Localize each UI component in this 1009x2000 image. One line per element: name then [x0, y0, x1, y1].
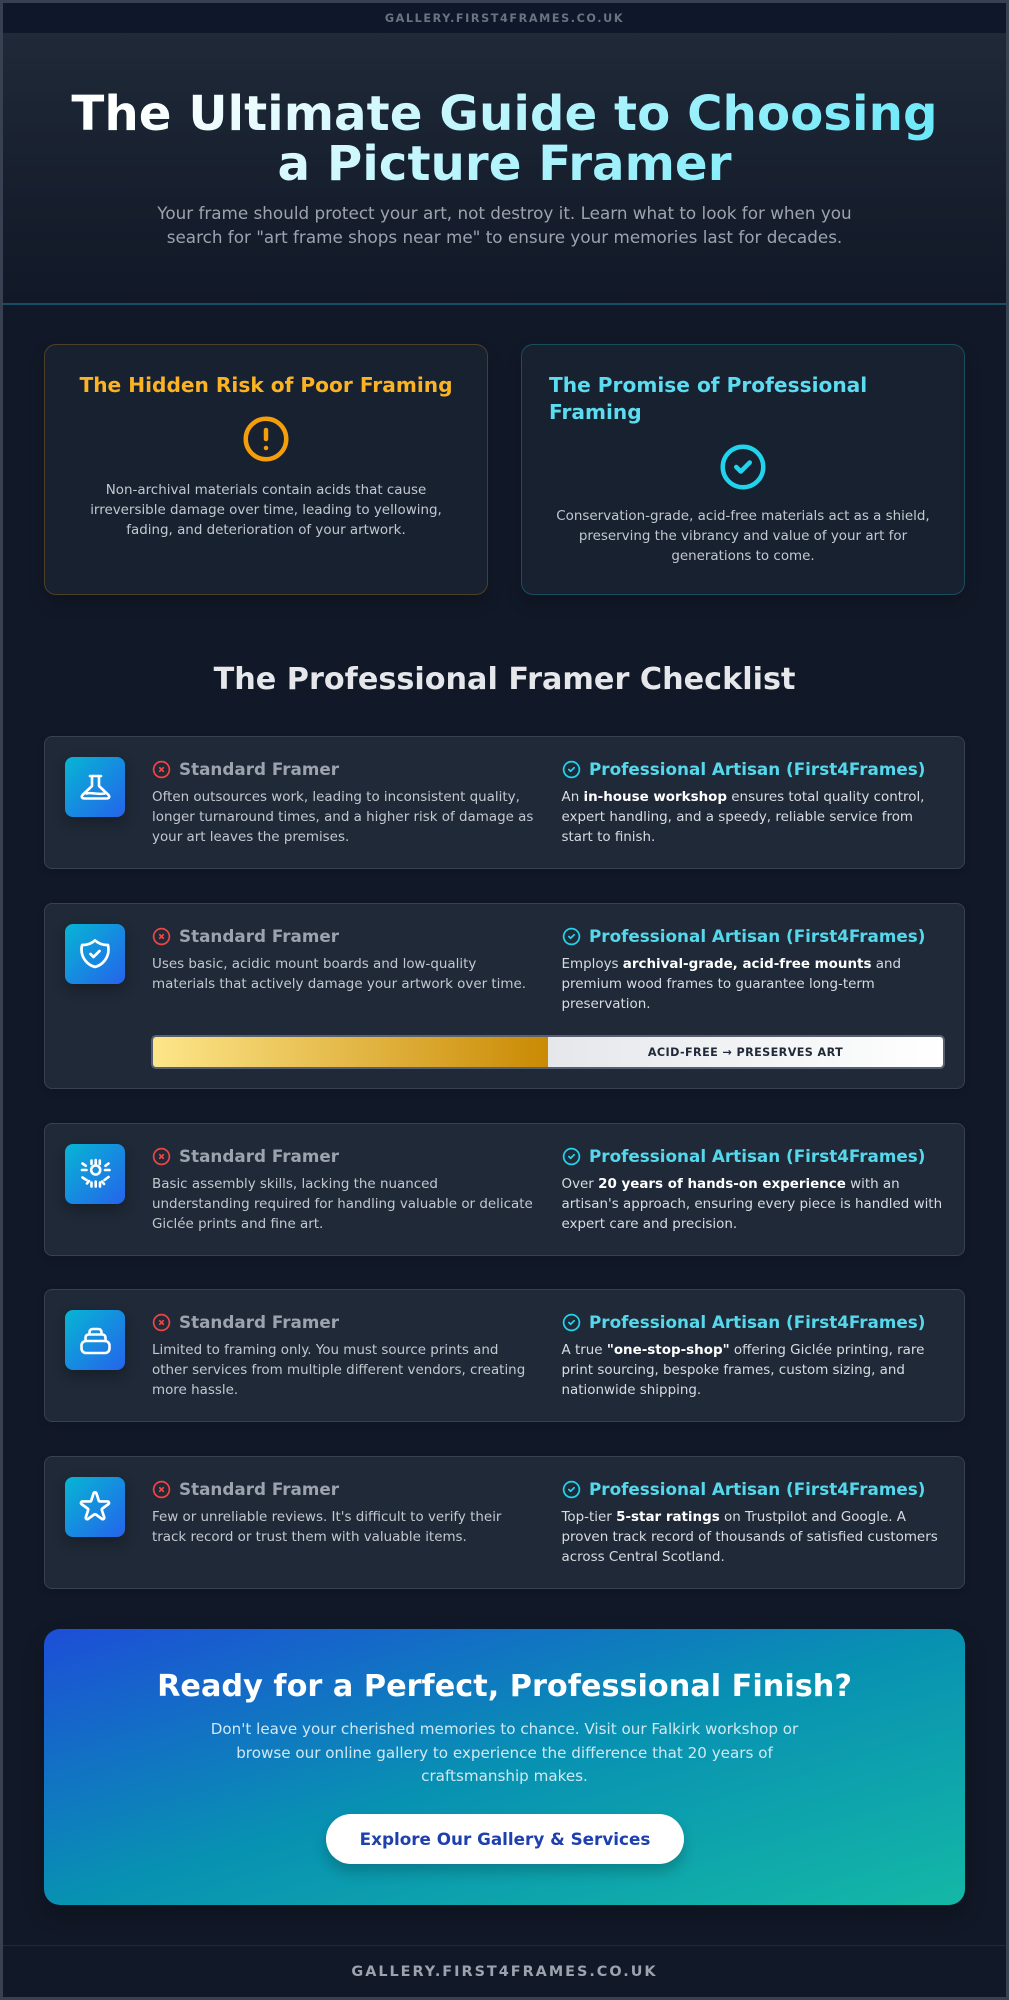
top url bar: [3, 3, 1006, 33]
standard text: Uses basic, acidic mount boards and low-quality: [152, 956, 476, 972]
checklist heading: The Professional Framer Checklist: [214, 662, 795, 697]
icon: check: [720, 444, 766, 490]
professional text: start to finish.: [562, 830, 655, 845]
acid-free white segment: ACID-FREE → PRESERVES ART: [648, 1046, 843, 1059]
panel: professional promise: [521, 344, 965, 595]
row: services: Professional Artisan (First4Frames): [589, 1312, 925, 1332]
icon: flask: [65, 757, 125, 817]
acidic gold segment: [153, 1037, 548, 1067]
title: a Picture Framer: [277, 136, 732, 192]
row: materials: [44, 903, 965, 1089]
professional heading: [562, 1312, 925, 1332]
standard heading: [152, 1146, 339, 1166]
subtitle: search for "art frame shops near me" to ensure your memories last for decades.: [167, 227, 842, 247]
icon: shield: [65, 924, 125, 984]
standard text: [152, 1342, 525, 1398]
row: materials: Standard Framer: [179, 926, 339, 946]
panel text: [556, 509, 930, 564]
title: [71, 86, 938, 192]
row: experience: [44, 1123, 965, 1256]
panel text: generations to come.: [671, 549, 815, 564]
cta text: browse our online gallery to experience the difference that 20 years of: [236, 1744, 773, 1762]
cta text: craftsmanship makes.: [421, 1767, 588, 1785]
panel: hidden risk: [44, 344, 488, 595]
panel text: Non-archival materials contain acids that cause: [106, 482, 426, 498]
cta button: [326, 1814, 684, 1864]
professional text: [562, 1342, 924, 1398]
icon: warning: [244, 416, 288, 462]
standard text: Few or unreliable reviews. It's difficult to verify their: [152, 1510, 501, 1524]
standard text: Giclée prints and fine art.: [152, 1217, 323, 1232]
standard text: [152, 956, 526, 992]
professional text: Over 20 years of hands-on experience with an: [562, 1176, 900, 1192]
professional text: artisan's approach, ensuring every piece is handled with: [562, 1197, 942, 1212]
cta text: [211, 1720, 798, 1785]
standard text: materials that actively damage your artwork over time.: [152, 977, 526, 992]
row: materials: Professional Artisan (First4Frames): [589, 926, 925, 946]
professional text: [561, 1510, 938, 1565]
professional text: premium wood frames to guarantee long-term: [562, 977, 875, 992]
standard text: [152, 790, 533, 845]
panel heading: The Hidden Risk of Poor Framing: [79, 373, 453, 397]
footer url: [3, 1945, 1006, 1997]
panel text: irreversible damage over time, leading to yellowing,: [90, 503, 442, 518]
standard heading: [152, 926, 339, 946]
row: workshop: [44, 736, 965, 869]
standard text: Often outsources work, leading to inconsistent quality,: [152, 790, 520, 804]
standard heading: [152, 759, 339, 779]
icon: stack: [65, 1310, 125, 1370]
icon: expertise burst: [65, 1144, 125, 1204]
standard text: your art leaves the premises.: [152, 830, 349, 845]
standard text: more hassle.: [152, 1383, 238, 1398]
professional text: expert handling, and a speedy, reliable service from: [562, 810, 913, 825]
professional text: print sourcing, bespoke frames, custom sizing, and: [562, 1363, 905, 1378]
professional text: expert care and precision.: [562, 1217, 737, 1232]
professional text: [562, 790, 924, 845]
professional text: An in-house workshop ensures total quality control,: [562, 790, 924, 804]
row: experience: Standard Framer: [179, 1146, 339, 1166]
panel text: [90, 482, 442, 538]
professional heading: [562, 1146, 925, 1166]
panel heading: [549, 373, 867, 424]
row: workshop: Professional Artisan (First4Frames): [589, 759, 925, 779]
subtitle: [157, 203, 852, 247]
subtitle: Your frame should protect your art, not destroy it. Learn what to look for when you: [157, 203, 852, 223]
standard text: other services from multiple different vendors, creating: [152, 1363, 525, 1378]
standard heading: [152, 1312, 339, 1332]
professional text: proven track record of thousands of satisfied customers: [562, 1530, 938, 1545]
hero header: [3, 33, 1006, 305]
professional text: A true "one-stop-shop" offering Giclée printing, rare: [562, 1342, 924, 1358]
professional text: Employs archival-grade, acid-free mounts and: [562, 956, 901, 972]
standard text: Limited to framing only. You must source prints and: [152, 1342, 498, 1358]
acid-free comparison bar: [151, 1035, 945, 1069]
row: experience: Professional Artisan (First4Frames): [589, 1146, 925, 1166]
row: services: [44, 1289, 965, 1422]
standard text: track record or trust them with valuable items.: [152, 1530, 467, 1545]
panel heading: The Promise of Professional: [549, 373, 867, 397]
row: workshop: Standard Framer: [179, 759, 339, 779]
professional text: [562, 1176, 942, 1232]
acid-free white segment: [548, 1037, 943, 1067]
cta heading: Ready for a Perfect, Professional Finish?: [157, 1669, 852, 1704]
row: reviews: [44, 1456, 965, 1589]
footer url: GALLERY.FIRST4FRAMES.CO.UK: [351, 1964, 658, 1980]
panel text: fading, and deterioration of your artwork.: [126, 523, 406, 538]
top url bar: GALLERY.FIRST4FRAMES.CO.UK: [385, 12, 624, 25]
professional text: across Central Scotland.: [562, 1550, 725, 1565]
icon: star: [65, 1477, 125, 1537]
row: reviews: Professional Artisan (First4Frames): [589, 1479, 925, 1499]
call to action panel: [44, 1629, 965, 1905]
standard text: [152, 1176, 533, 1232]
panel text: Conservation-grade, acid-free materials act as a shield,: [556, 509, 930, 524]
row: services: Standard Framer: [179, 1312, 339, 1332]
professional heading: [562, 759, 925, 779]
professional text: [562, 956, 901, 1012]
professional text: Top-tier 5-star ratings on Trustpilot and Google. A: [562, 1510, 906, 1524]
panel text: preserving the vibrancy and value of your art for: [579, 529, 907, 544]
title: The Ultimate Guide to Choosing: [71, 86, 938, 142]
cta text: Don't leave your cherished memories to chance. Visit our Falkirk workshop or: [211, 1720, 798, 1738]
standard text: Basic assembly skills, lacking the nuanced: [152, 1176, 438, 1192]
standard text: [152, 1510, 502, 1545]
standard text: longer turnaround times, and a higher risk of damage as: [152, 810, 533, 825]
panel heading: Framing: [549, 400, 642, 424]
professional heading: [562, 1479, 925, 1499]
cta button: Explore Our Gallery & Services: [360, 1829, 650, 1849]
standard text: understanding required for handling valuable or delicate: [152, 1197, 533, 1212]
professional text: preservation.: [562, 997, 651, 1012]
professional heading: [562, 926, 925, 946]
row: reviews: Standard Framer: [179, 1479, 339, 1499]
standard heading: [152, 1479, 339, 1499]
professional text: nationwide shipping.: [562, 1383, 701, 1398]
